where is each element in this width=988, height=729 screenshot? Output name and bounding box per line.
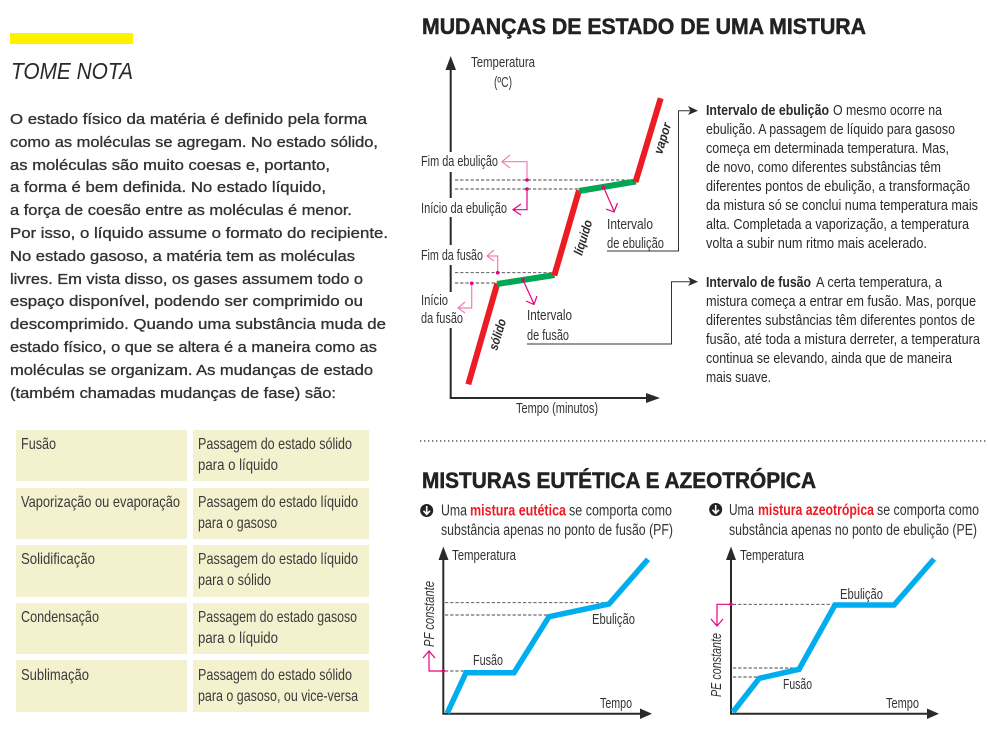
body text: moléculas se organizam. As mudanças de estado <box>10 362 373 379</box>
body text: descomprimido. Quando uma substância muda de <box>10 316 386 333</box>
row: condensação: Condensação <box>21 609 99 626</box>
pink marker: início da ebulição <box>513 187 529 215</box>
chart labels: sólido <box>486 317 509 352</box>
axes <box>726 546 939 719</box>
chart labels: da fusão <box>421 311 463 327</box>
curve: liquid segment <box>554 190 579 276</box>
text block: intervalo de fusão: mais suave. <box>706 369 771 386</box>
row: sublimação: para o gasoso, ou vice-versa <box>198 688 358 705</box>
body text: (também chamadas mudanças de fase) são: <box>10 385 336 402</box>
curve: boiling interval <box>579 182 636 191</box>
connector: boiling text <box>607 106 698 251</box>
chart labels: de fusão <box>527 328 569 344</box>
curve <box>447 559 648 713</box>
icon: down arrow <box>709 503 722 516</box>
body text: espaço disponível, podendo ser comprimido ou <box>10 293 363 310</box>
text block: intervalo de ebulição: Intervalo de ebulição <box>706 102 829 119</box>
curve: melting interval <box>497 275 554 284</box>
chart labels: Temperatura <box>471 55 536 71</box>
row: sublimação: Passagem do estado sólido <box>198 667 352 684</box>
chart labels: Intervalo <box>607 217 653 233</box>
body text <box>10 111 388 402</box>
description: se comporta como <box>569 502 672 520</box>
chart labels: líquido <box>571 218 595 257</box>
text block: intervalo de ebulição: volta a subir num ritmo mais acelerado. <box>706 235 927 252</box>
row: fusão: Fusão <box>21 436 56 453</box>
chart labels: Fim da ebulição <box>421 154 498 170</box>
chart: eutectic curve <box>422 546 652 719</box>
text block: intervalo de fusão: A certa temperatura, a <box>816 274 943 291</box>
labels: Ebulição <box>840 587 883 603</box>
body text: a força de coesão entre as moléculas é menor. <box>10 202 352 219</box>
row: fusão: para o líquido <box>198 457 278 474</box>
description <box>729 502 979 539</box>
axes <box>446 56 660 403</box>
panel: tome nota <box>10 33 388 402</box>
row: sublimação <box>16 660 369 712</box>
row: vaporização: para o gasoso <box>198 515 277 532</box>
chart labels: (ºC) <box>494 75 512 91</box>
labels <box>709 548 919 712</box>
description: substância apenas no ponto de fusão (PF) <box>441 522 673 539</box>
labels: Tempo <box>886 696 919 712</box>
chart: heating curve of a mixture <box>421 55 698 417</box>
axes <box>438 546 652 719</box>
chart labels: Intervalo <box>527 308 572 324</box>
text block: intervalo de ebulição <box>706 102 978 252</box>
pink marker: início da fusão <box>458 282 474 313</box>
labels: Temperatura <box>740 548 805 564</box>
row: solidificação <box>16 545 369 597</box>
pink marker: fim da fusão <box>487 250 500 275</box>
body text: Por isso, o líquido assume o formato do recipiente. <box>10 225 388 242</box>
heading: mudanças de estado: MUDANÇAS DE ESTADO DE UMA MISTURA <box>422 14 866 39</box>
row: solidificação: Passagem do estado líquido <box>198 551 358 568</box>
chart labels: Tempo (minutos) <box>516 401 598 417</box>
labels: PF constante <box>422 581 438 647</box>
row: condensação: para o líquido <box>198 630 278 647</box>
body text: No estado gasoso, a matéria tem as moléculas <box>10 248 355 265</box>
labels: Ebulição <box>592 612 635 628</box>
body text: estado físico, o que se altera é a maneira como as <box>10 339 377 356</box>
labels: PE constante <box>709 633 725 697</box>
labels: Tempo <box>600 696 632 712</box>
connector: melting text <box>527 277 698 344</box>
pink marker: intervalo de fusão <box>521 278 537 304</box>
body text: O estado físico da matéria é definido pela forma <box>10 111 368 128</box>
row: solidificação: para o sólido <box>198 572 271 589</box>
labels: Temperatura <box>452 548 517 564</box>
chart labels: Fim da fusão <box>421 248 483 264</box>
text block: intervalo de ebulição: de novo, como diferentes substâncias têm <box>706 159 941 176</box>
body text: as moléculas são muito coesas e, portanto, <box>10 157 330 174</box>
pink marker: intervalo de ebulição <box>602 186 618 212</box>
curve: solid segment <box>468 284 497 384</box>
icon: down arrow <box>420 504 433 517</box>
body text: a forma é bem definida. No estado líquido, <box>10 179 326 196</box>
labels <box>422 548 635 712</box>
row: fusão <box>16 430 369 481</box>
curve <box>733 559 934 712</box>
pink marker: PF <box>423 651 445 673</box>
panel: mistura azeotrópica <box>709 502 979 719</box>
heading: tome nota: TOME NOTA <box>11 58 133 84</box>
row: solidificação: Solidificação <box>21 551 95 568</box>
table: phase changes <box>16 430 369 712</box>
description: Uma <box>441 502 467 520</box>
row: fusão: Passagem do estado sólido <box>198 436 352 453</box>
pink marker: fim da ebulição <box>502 155 529 182</box>
row: sublimação: Sublimação <box>21 667 89 684</box>
chart labels: vapor <box>651 120 674 156</box>
row: vaporização: Passagem do estado líquido <box>198 494 358 511</box>
text block: intervalo de ebulição: O mesmo ocorre na <box>833 102 943 119</box>
description: mistura eutética <box>470 502 566 520</box>
description: Uma <box>729 502 754 519</box>
chart labels: de ebulição <box>607 236 664 252</box>
yellow accent bar <box>10 33 133 44</box>
curve: vapor segment <box>636 98 661 182</box>
description <box>441 502 673 539</box>
text block: intervalo de fusão <box>706 274 981 386</box>
row: vaporização <box>16 488 369 539</box>
chart: azeotropic curve <box>709 546 939 719</box>
body text: como as moléculas se agregam. No estado sólido, <box>10 134 378 151</box>
heading: misturas eutética e azeotrópica: MISTURAS EUTÉTICA E AZEOTRÓPICA <box>422 468 816 493</box>
chart labels: Início <box>421 293 448 309</box>
labels: Fusão <box>473 653 503 669</box>
description: mistura azeotrópica <box>758 502 874 519</box>
panel: mistura eutética <box>420 502 673 719</box>
chart labels: Início da ebulição <box>421 201 507 217</box>
chart labels <box>421 55 674 417</box>
pink marker: PE <box>711 602 733 626</box>
text block: intervalo de fusão: Intervalo de fusão <box>706 274 811 291</box>
body text: livres. Em vista disso, os gases assumem todo o <box>10 271 363 288</box>
row: condensação: Passagem do estado gasoso <box>198 609 357 626</box>
labels: Fusão <box>783 677 812 693</box>
row: condensação <box>16 603 369 654</box>
row: vaporização: Vaporização ou evaporação <box>21 494 180 511</box>
